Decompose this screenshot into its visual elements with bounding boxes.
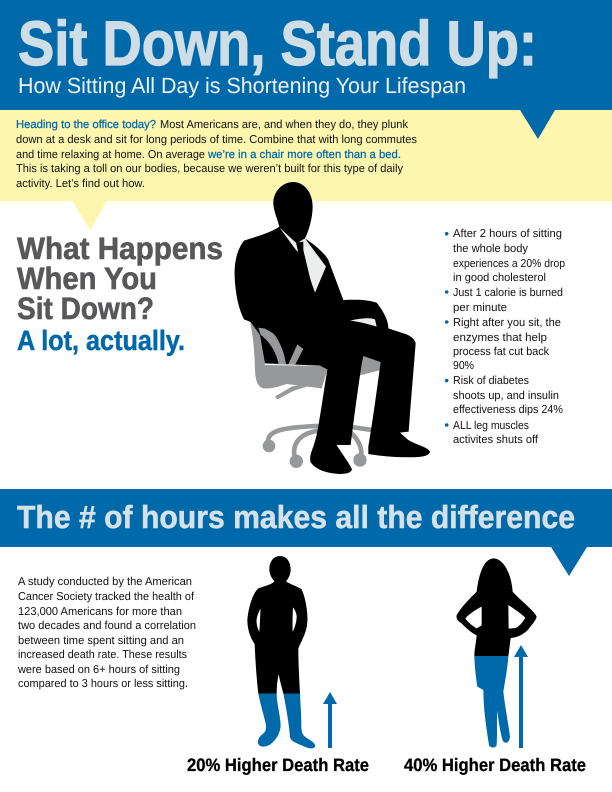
banner heading: The # of hours makes all the difference	[17, 499, 575, 535]
study text: between time spent sitting and an	[18, 635, 184, 647]
heading: what happens: When You	[17, 261, 157, 296]
bullet list: experiences a 20% drop	[453, 258, 565, 270]
intro text: activity. Let’s find out how.	[16, 178, 145, 190]
tie	[296, 242, 313, 292]
heading: what happens: Sit Down?	[17, 291, 154, 326]
bullet list	[445, 228, 565, 446]
office chair	[250, 322, 382, 468]
armrest highlight	[350, 318, 377, 327]
intro text	[16, 119, 417, 190]
label: 40 percent higher death rate: 40% Higher Death Rate	[404, 755, 586, 775]
study text: two decades and found a correlation	[18, 620, 196, 632]
intro text: we’re in a chair more often than a bed.	[207, 149, 401, 161]
bullet list: Risk of diabetes	[453, 375, 529, 387]
heading: what happens: What Happens	[17, 231, 223, 266]
panel: header blue band	[0, 0, 612, 139]
bullet list: ALL leg muscles	[453, 420, 529, 432]
study text: A study conducted by the American	[18, 576, 192, 588]
study text: were based on 6+ hours of sitting	[17, 664, 180, 676]
bullet list: in good cholesterol	[453, 272, 546, 284]
panel: intro yellow band	[0, 110, 612, 230]
intro text: This is taking a toll on our bodies, because we weren’t built for this type of daily	[16, 163, 403, 175]
bullet list: effectiveness dips 24%	[453, 404, 563, 416]
bullet list: Right after you sit, the	[453, 317, 561, 329]
heading: what happens	[17, 231, 223, 356]
study text: 123,000 Americans for more than	[18, 606, 182, 618]
intro text: and time relaxing at home. On average	[16, 149, 205, 161]
bullet list: process fat cut back	[453, 346, 549, 358]
bullet list: Just 1 calorie is burned	[453, 287, 563, 299]
illustration: seated businessman on office chair	[235, 182, 430, 474]
arrow: 20 percent	[323, 692, 337, 748]
study text: increased death rate. These results	[18, 649, 187, 661]
bullet list: shoots up, and insulin	[453, 390, 559, 402]
bullet list: 90%	[453, 360, 474, 372]
study text: compared to 3 hours or less sitting.	[18, 678, 188, 690]
study text: Cancer Society tracked the health of	[18, 591, 195, 603]
man silhouette	[235, 182, 430, 474]
study text	[17, 576, 196, 690]
bullet list: After 2 hours of sitting	[453, 228, 562, 240]
bullet list: enzymes that help	[453, 332, 547, 344]
bullet list: the whole body	[453, 243, 528, 255]
icon: standing man silhouette	[247, 556, 315, 748]
arrow: 40 percent	[514, 645, 528, 748]
icon: standing woman silhouette	[456, 558, 537, 747]
intro text: Most Americans are, and when they do, they plunk	[160, 119, 408, 131]
shirt	[279, 227, 326, 293]
intro text: down at a desk and sit for long periods of time. Combine that with long commutes	[16, 134, 417, 146]
subtitle: How Sitting All Day is Shortening Your Lifespan	[18, 73, 466, 98]
chair arm supports	[258, 328, 303, 364]
label: 20 percent higher death rate: 20% Higher Death Rate	[187, 755, 369, 775]
title: Sit Down, Stand Up:	[18, 9, 537, 79]
subheading: A lot, actually.	[17, 325, 185, 356]
bullet list: per minute	[453, 302, 507, 314]
bullet list: activites shuts off	[453, 434, 539, 446]
panel: hours banner	[0, 489, 612, 576]
intro text: Heading to the office today?	[16, 119, 156, 131]
